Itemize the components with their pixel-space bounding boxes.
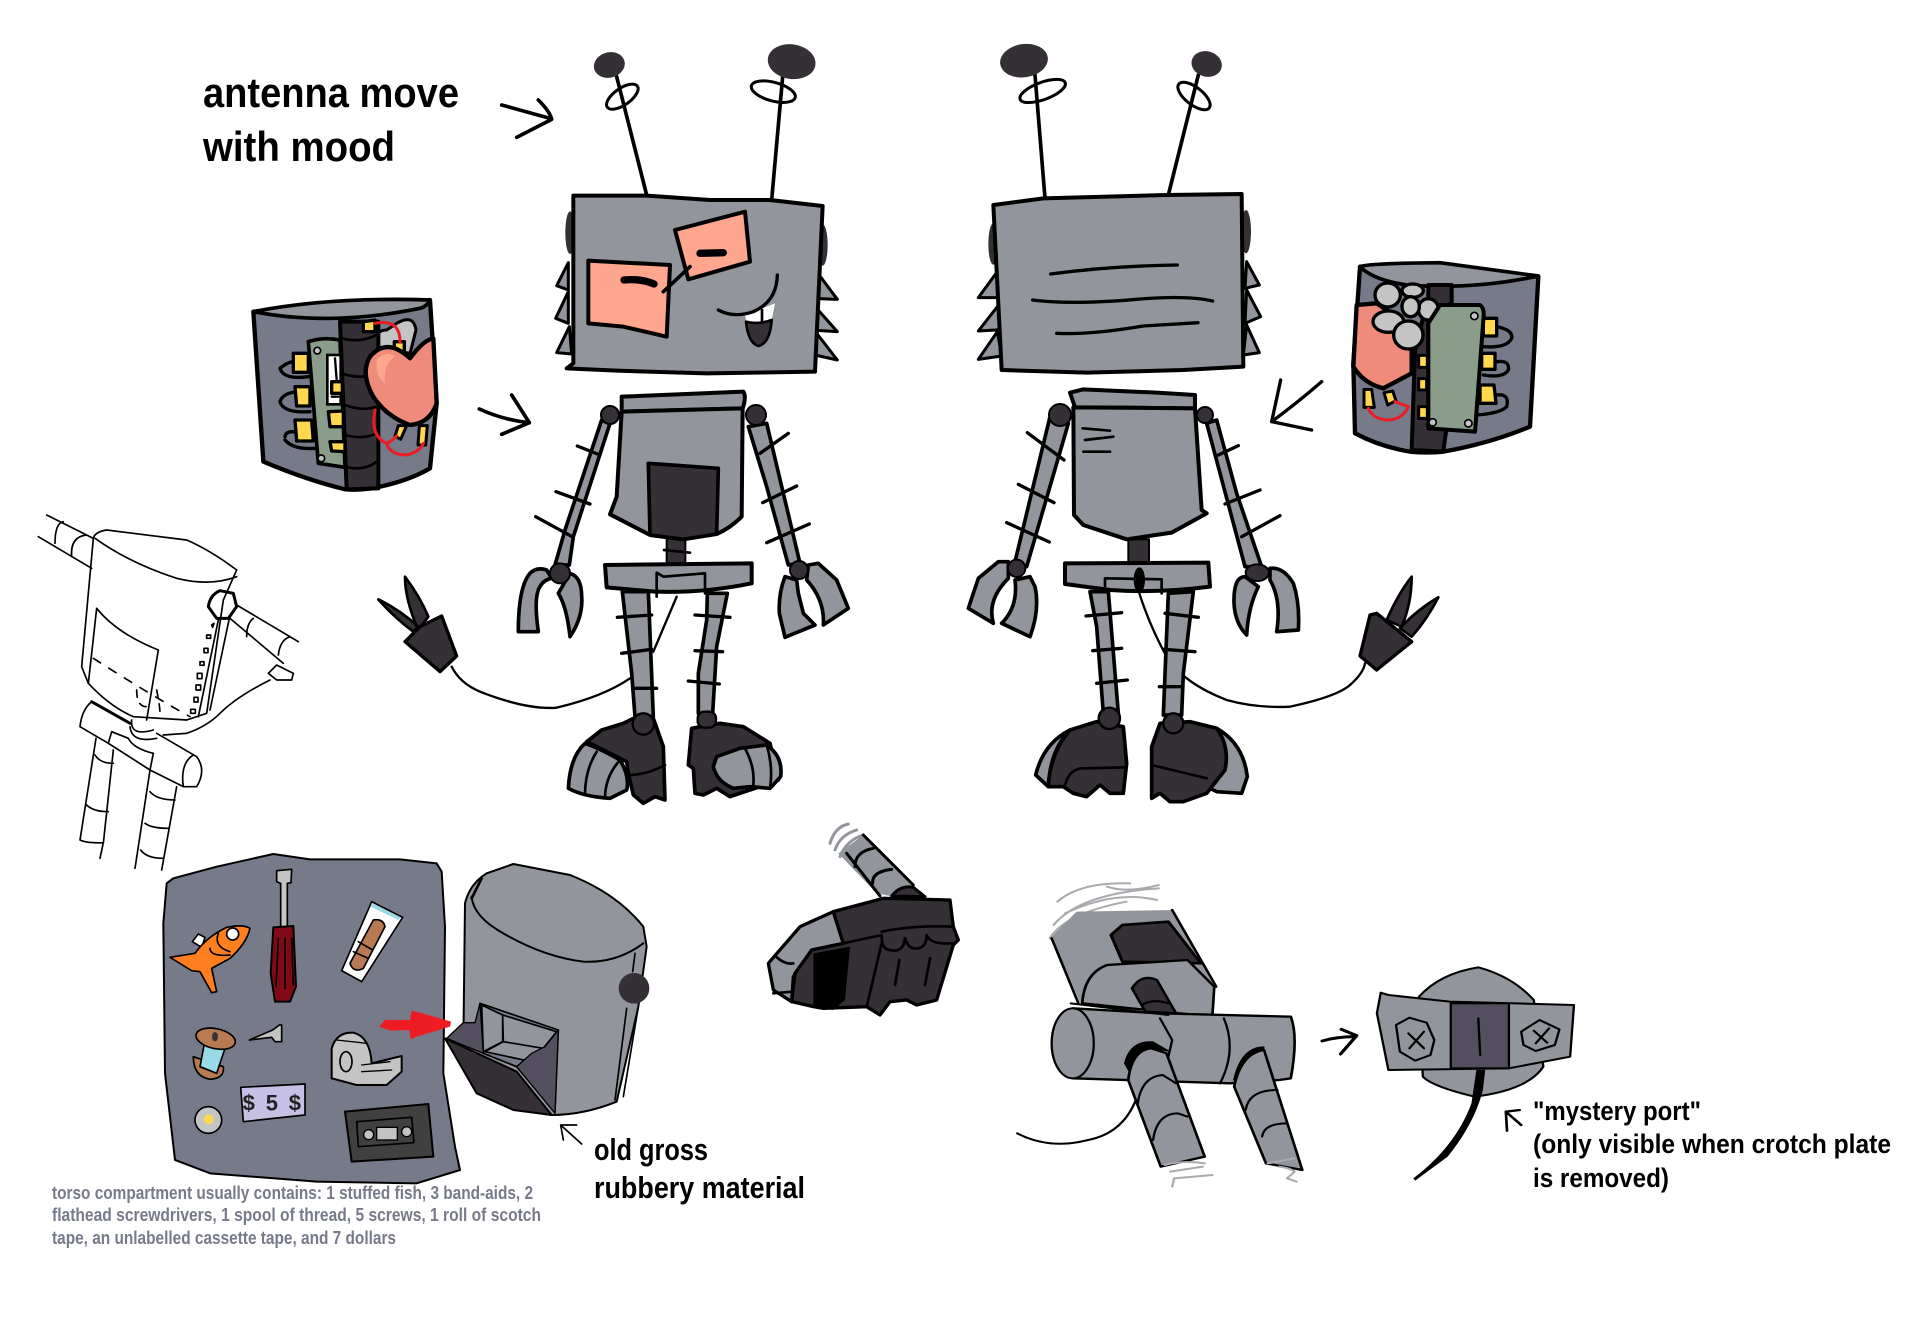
callout: old gross rubbery material: rubbery material <box>594 1170 805 1205</box>
callout: mystery port: is removed) <box>1533 1163 1669 1193</box>
callout: old gross rubbery material: old gross <box>594 1132 708 1167</box>
fan blades <box>1373 283 1438 349</box>
heading: antenna move with mood <box>202 69 459 170</box>
icon: screwdriver <box>271 869 296 1002</box>
back body: torso, arms, legs, feet and tail <box>968 380 1438 802</box>
icon: stuffed fish <box>170 926 250 993</box>
icon: band-aid packet <box>342 902 403 982</box>
panel: open torso compartment with heart, front view <box>253 299 437 490</box>
panel: torso compartment with fan and circuit board, back view <box>1353 263 1538 452</box>
arrow: to back compartment <box>1272 380 1322 430</box>
text block: torso compartment contents <box>52 1182 541 1248</box>
arrow: to mystery port label <box>1506 1110 1521 1131</box>
callout: mystery port <box>1533 1096 1891 1193</box>
icon: spool of thread <box>193 1025 237 1079</box>
front head with antennae <box>502 41 837 373</box>
arrow: red, into torso <box>379 1011 451 1039</box>
arrow: to mystery port <box>1322 1029 1357 1054</box>
text block: torso compartment contents: tape, an unlabelled cassette tape, and 7 dollars <box>52 1227 396 1248</box>
heading: antenna move with mood: antenna move <box>203 69 459 116</box>
front body: torso, arms, legs, feet and tail <box>378 392 848 803</box>
tail wire and plug <box>1139 577 1438 707</box>
forearm and fist detail <box>768 824 958 1015</box>
callout: old gross rubbery material <box>594 1132 805 1205</box>
icon: screw <box>249 1025 282 1042</box>
hips detail, view from below <box>1017 883 1574 1187</box>
icon: five dollar bill <box>241 1084 305 1122</box>
tail wire and plug <box>378 577 677 708</box>
heading: antenna move with mood: with mood <box>202 123 395 170</box>
text block: torso compartment contents: torso compartment usually contains: 1 stuffed fish, 3 band-aids, 2 <box>52 1182 533 1203</box>
mystery port plate <box>1377 967 1574 1181</box>
line sketch: torso and hips outline <box>38 515 298 870</box>
text block: torso compartment contents: flathead screwdrivers, 1 spool of thread, 5 screws, 1 roll of scotch <box>52 1204 541 1225</box>
torso with open compartment flap <box>445 864 649 1115</box>
back head with antennae <box>978 41 1261 373</box>
panel: torso contents with stuffed fish, screwdriver, band-aid, spool, screw, tape, dollars and cassette <box>163 854 649 1183</box>
icon: five dollar bill: $5$ <box>243 1091 301 1116</box>
arrow: to rubbery flap <box>561 1125 582 1144</box>
callout: mystery port: "mystery port" <box>1533 1096 1701 1126</box>
icon: unlabelled cassette tape <box>345 1104 433 1162</box>
icon: roll of scotch tape <box>332 1033 402 1085</box>
arrow: to heart compartment <box>479 395 529 434</box>
icon: screw head washer <box>195 1107 222 1133</box>
